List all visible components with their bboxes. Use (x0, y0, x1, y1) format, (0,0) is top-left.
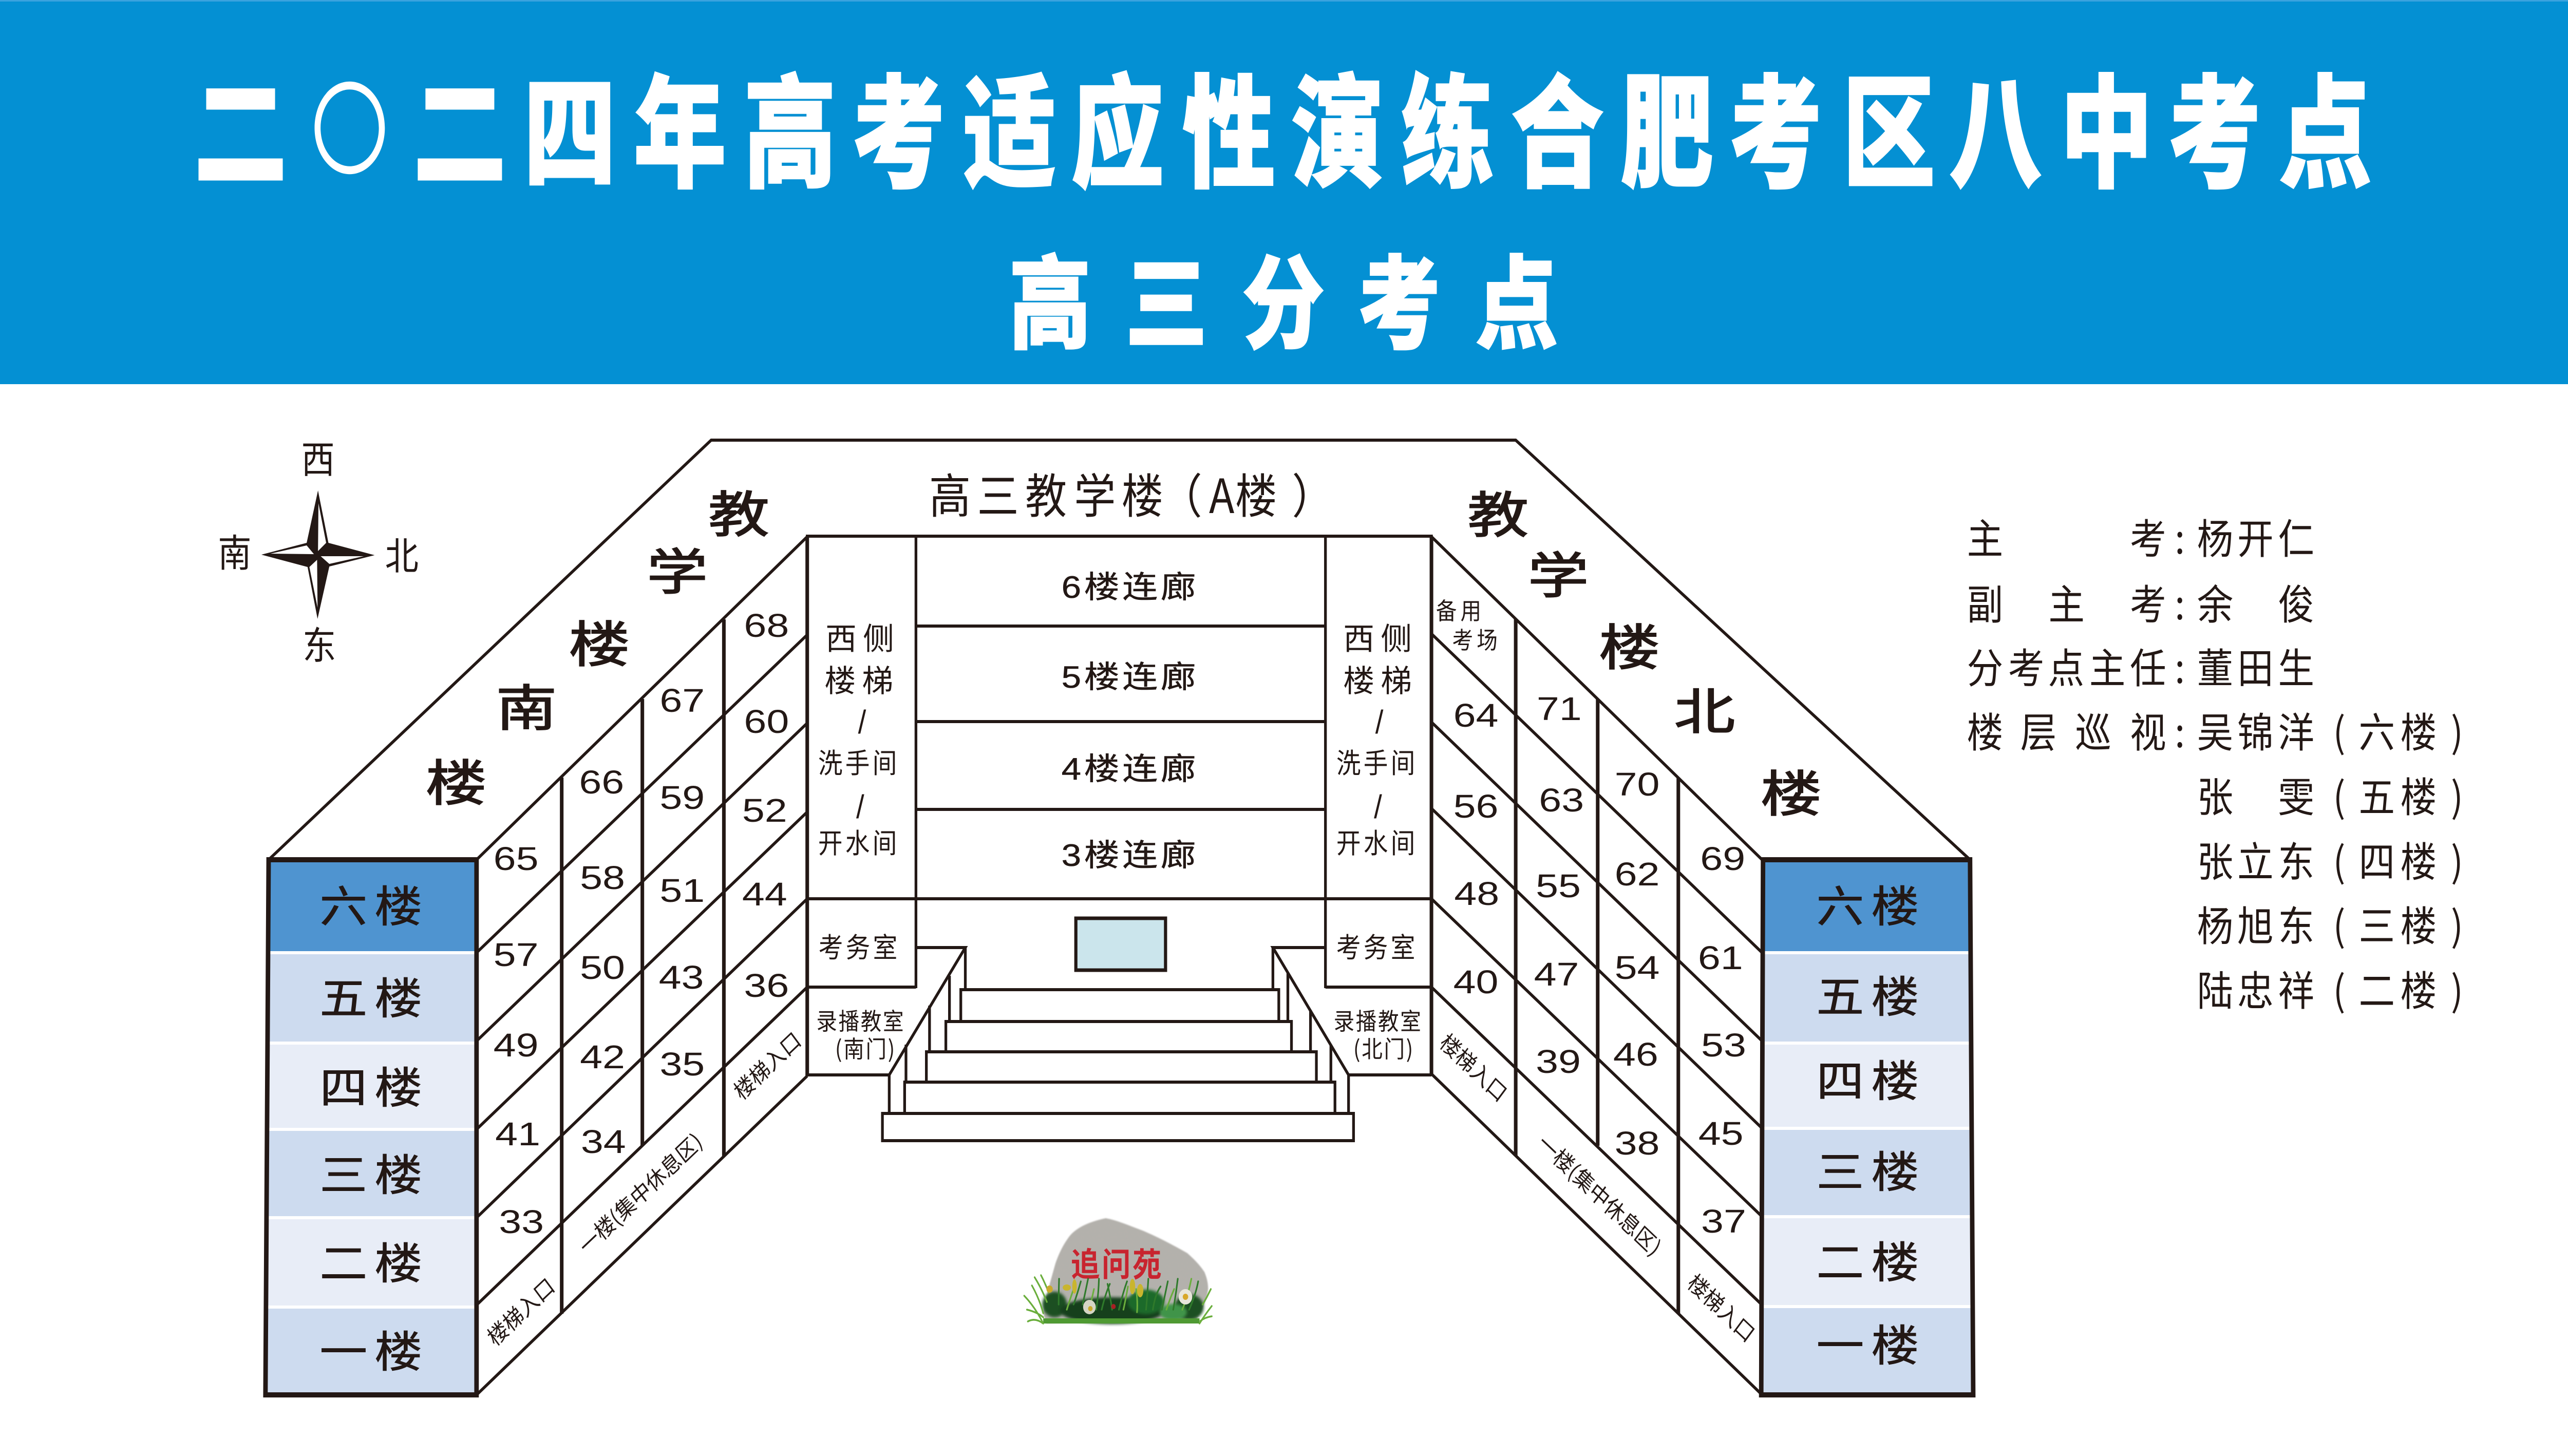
room numbers: north wing: 61 (1698, 940, 1743, 976)
panel: staff list: 主考:杨开仁 (1967, 506, 2314, 565)
room numbers: south wing: 60 (744, 704, 789, 740)
room numbers: south wing: 67 (659, 683, 705, 719)
rotated labels: south wing ground floor (480, 1023, 806, 1352)
main title: 〇 (311, 48, 389, 197)
rotated labels: south wing ground floor: 一楼(集中休息区) (572, 1124, 707, 1261)
rock inscription: 追问苑 (1071, 1239, 1163, 1286)
room numbers: north wing: 48 (1454, 876, 1499, 912)
panel: east column labels (1334, 614, 1422, 1065)
room numbers: south wing: 43 (659, 959, 704, 996)
roof label: 北楼教学楼: 学 (1528, 537, 1589, 608)
roof label: 南楼教学楼: 南 (496, 669, 557, 740)
header banner (0, 0, 2568, 384)
panel: east column labels: 西侧 (1343, 614, 1418, 659)
panel: east column labels: (北门) (1353, 1031, 1414, 1065)
grass clump (1024, 1275, 1212, 1324)
room numbers: north wing: 70 (1615, 766, 1659, 803)
main title: 考 (853, 35, 945, 213)
main title: 性 (1183, 35, 1275, 213)
roof outline (269, 440, 1970, 860)
room numbers: south wing: 58 (580, 860, 625, 896)
main title: 二 (194, 35, 287, 213)
panel: east column labels: 考务室 (1336, 925, 1418, 966)
room numbers: south wing: 51 (659, 873, 705, 909)
roof label: 北楼教学楼: 北 (1674, 673, 1735, 744)
room numbers: south wing: 41 (495, 1116, 540, 1152)
main title: 二 (413, 35, 506, 213)
label: spare exam room: 考场 (1452, 622, 1501, 656)
room numbers: north wing: 39 (1536, 1044, 1581, 1080)
panel: north wing floor legend (1761, 860, 1973, 1395)
rotated labels: north wing ground floor: 楼梯入口 (1683, 1265, 1762, 1349)
main title: 适 (964, 35, 1056, 213)
main title: 肥 (1620, 35, 1713, 213)
main title (194, 35, 2372, 213)
room numbers: north wing (1453, 691, 1746, 1240)
panel: east column labels: / (1374, 788, 1382, 825)
rotated labels: south wing ground floor: 楼梯入口 (727, 1023, 806, 1106)
compass rose: 西 (301, 429, 335, 484)
room numbers: north wing: 71 (1537, 691, 1582, 727)
room numbers: south wing: 65 (494, 841, 539, 877)
room numbers: south wing (494, 608, 789, 1240)
main title: 区 (1843, 35, 1935, 213)
panel: west column labels: 楼梯 (824, 656, 899, 701)
room numbers: north wing: 62 (1615, 856, 1659, 893)
panel: staff list: 陆忠祥(二楼) (2197, 958, 2463, 1017)
room numbers: south wing: 57 (494, 937, 539, 973)
main title: 考 (2168, 35, 2261, 213)
room numbers: south wing: 33 (499, 1204, 544, 1240)
corridor labels: 3楼连廊 (1062, 838, 1199, 873)
room numbers: north wing: 45 (1698, 1115, 1744, 1152)
compass rose: 东 (303, 615, 336, 670)
panel: east column labels: 开水间 (1336, 821, 1418, 861)
rotated labels: south wing ground floor: 楼梯入口 (480, 1269, 560, 1352)
panel: east column labels: 楼梯 (1343, 656, 1418, 701)
panel: west column labels: 开水间 (818, 821, 900, 861)
corridor labels: 6楼连廊 (1062, 570, 1199, 604)
room numbers: north wing: 54 (1615, 950, 1659, 986)
corridor labels: 4楼连廊 (1062, 752, 1199, 786)
room numbers: south wing: 59 (659, 780, 705, 816)
main title: 四 (523, 35, 616, 213)
steps (882, 990, 1353, 1141)
room numbers: north wing: 55 (1536, 868, 1581, 904)
rotated labels: north wing ground floor: 一楼(集中休息区) (1533, 1126, 1668, 1262)
rotated labels: north wing ground floor: 楼梯入口 (1434, 1025, 1514, 1108)
room numbers: south wing: 34 (581, 1124, 626, 1160)
panel: staff list: 副主考:余俊 (1967, 572, 2314, 631)
panel: south wing floor legend: 四楼 (319, 1053, 429, 1116)
room numbers: south wing: 49 (494, 1027, 539, 1064)
subtitle: 考 (1358, 223, 1440, 369)
panel: west column labels (816, 614, 905, 1065)
compass rose: 南 (218, 523, 252, 578)
roof label: 南楼教学楼: 楼 (569, 606, 630, 676)
room numbers: south wing: 68 (744, 608, 789, 644)
room numbers: north wing: 56 (1453, 788, 1498, 825)
panel: staff list: 楼层巡视:吴锦洋(六楼) (1967, 700, 2463, 759)
room numbers: north wing: 53 (1701, 1027, 1746, 1064)
room numbers: north wing: 38 (1615, 1125, 1659, 1162)
room numbers: south wing: 44 (742, 876, 787, 913)
panel: north wing wall grid (1431, 537, 1762, 1395)
compass rose (218, 429, 419, 670)
staircase (882, 948, 1353, 1141)
room numbers: south wing: 42 (580, 1039, 625, 1075)
panel: west column labels: 西侧 (825, 614, 900, 659)
panel: north wing floor legend: 六楼 (1817, 872, 1926, 935)
panel: south wing floor legend (266, 860, 477, 1395)
panel: south wing floor legend: 一楼 (319, 1317, 429, 1380)
room numbers: south wing: 50 (580, 950, 625, 986)
room numbers: south wing: 66 (579, 764, 624, 801)
subtitle: 分 (1242, 223, 1325, 369)
panel: staff list: 杨旭东(三楼) (2197, 894, 2463, 953)
panel: south wing floor legend: 五楼 (319, 964, 429, 1027)
panel: staff list (1967, 506, 2463, 1017)
roof label: 北楼教学楼 (1467, 476, 1822, 826)
roof label: 北楼教学楼: 楼 (1599, 609, 1660, 679)
subtitle (1009, 223, 1558, 369)
main title: 年 (634, 35, 726, 213)
compass rose: 北 (385, 526, 419, 581)
rock body (1043, 1218, 1208, 1323)
panel: north wing floor legend: 四楼 (1817, 1047, 1926, 1109)
main title: 演 (1291, 35, 1384, 213)
butterflies and flowers (1046, 1285, 1053, 1293)
heading: A building: 高三教学楼（A楼） (929, 458, 1334, 527)
room numbers: north wing: 63 (1539, 782, 1584, 819)
main title: 中 (2060, 35, 2153, 213)
rotated labels: north wing ground floor (1434, 1025, 1762, 1349)
roof label: 南楼教学楼 (426, 476, 769, 815)
room numbers: south wing: 35 (659, 1046, 705, 1083)
room numbers: north wing: 64 (1453, 697, 1498, 734)
label: spare exam room: 备用 (1436, 593, 1485, 627)
main title: 合 (1511, 35, 1604, 213)
panel: west column labels: 考务室 (819, 925, 900, 966)
corridor labels: 5楼连廊 (1062, 660, 1199, 694)
label: spare exam room (1436, 593, 1501, 656)
subtitle: 点 (1476, 223, 1558, 369)
left handrail (889, 948, 966, 1112)
room numbers: north wing: 46 (1613, 1036, 1658, 1073)
corridor labels (1062, 570, 1199, 873)
room numbers: north wing: 37 (1701, 1203, 1746, 1240)
panel: west column labels: 录播教室 (816, 1003, 905, 1037)
panel: east column labels: 洗手间 (1336, 741, 1418, 781)
panel: north wing floor legend: 一楼 (1817, 1311, 1926, 1374)
panel: north wing floor legend: 五楼 (1817, 962, 1926, 1025)
roof label: 南楼教学楼: 学 (647, 533, 708, 604)
subtitle: 三 (1125, 223, 1207, 369)
icon: engraved rock with grass (1024, 1218, 1212, 1324)
room numbers: south wing: 52 (742, 792, 787, 829)
room numbers: south wing: 36 (744, 968, 789, 1004)
panel: east column labels: 录播教室 (1334, 1003, 1422, 1037)
panel: south wing floor legend: 二楼 (319, 1229, 429, 1292)
main title: 高 (744, 35, 836, 213)
panel: staff list: 张雯(五楼) (2197, 765, 2463, 824)
room numbers: north wing: 47 (1534, 956, 1579, 993)
panel: west column labels: 洗手间 (818, 741, 900, 781)
room numbers: north wing: 69 (1700, 841, 1745, 877)
panel: south wing floor legend: 六楼 (319, 872, 429, 935)
room numbers: north wing: 40 (1453, 964, 1498, 1000)
panel: north wing floor legend: 二楼 (1817, 1228, 1926, 1291)
main title: 应 (1071, 35, 1164, 213)
panel: west column labels: / (856, 788, 864, 825)
main title: 点 (2279, 35, 2372, 213)
main title: 八 (1949, 35, 2042, 213)
main title: 练 (1402, 35, 1494, 213)
panel: north wing floor legend: 三楼 (1817, 1138, 1926, 1200)
panel: staff list: 张立东(四楼) (2197, 829, 2463, 888)
panel: west column labels: (南门) (835, 1031, 896, 1065)
panel: west column labels: / (858, 704, 866, 741)
roof label: 北楼教学楼: 楼 (1761, 755, 1822, 826)
roof label: 南楼教学楼: 教 (708, 476, 769, 546)
main title: 考 (1729, 35, 1822, 213)
icon: wall screen (1076, 918, 1165, 970)
panel: central building frame (806, 536, 1433, 1076)
subtitle: 高 (1009, 223, 1091, 369)
roof label: 南楼教学楼: 楼 (426, 744, 486, 815)
panel: south wing floor legend: 三楼 (319, 1141, 429, 1203)
right handrail (1273, 948, 1349, 1112)
roof label: 北楼教学楼: 教 (1467, 476, 1528, 547)
panel: south wing wall grid (477, 537, 807, 1395)
panel: east column labels: / (1375, 704, 1384, 741)
panel: staff list: 分考点主任:董田生 (1967, 636, 2314, 695)
